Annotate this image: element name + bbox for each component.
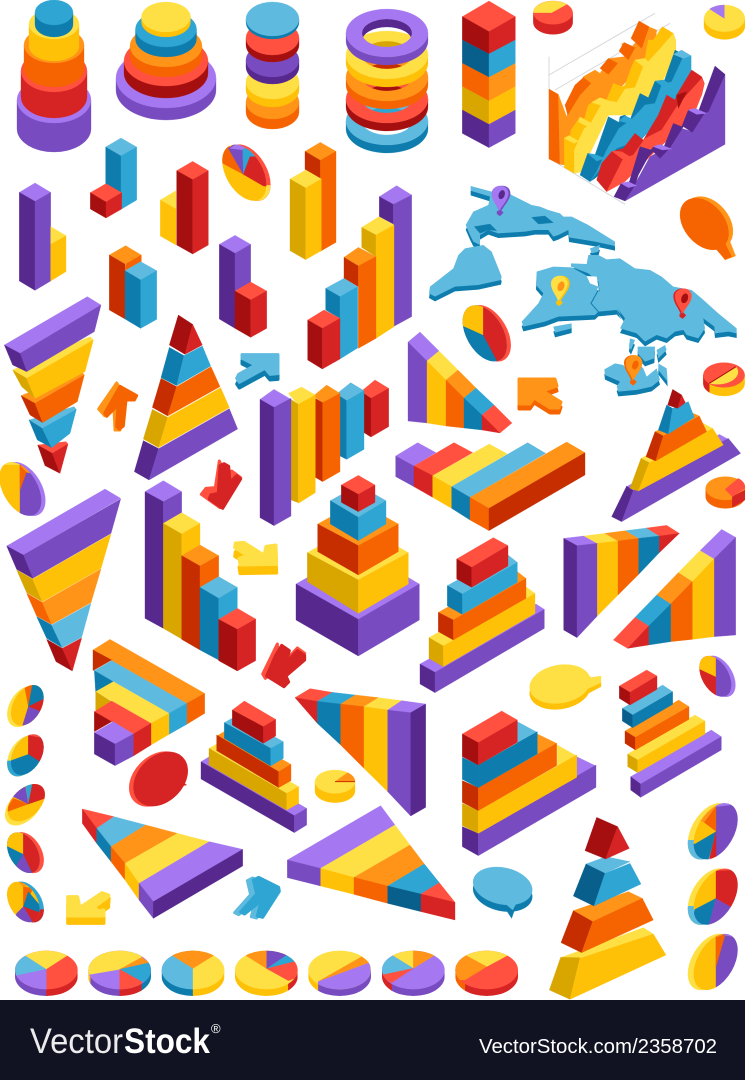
- orange arrow pointing up-left: [519, 379, 561, 413]
- right pie 3: [688, 934, 738, 990]
- descending bar chart: [145, 481, 256, 671]
- arrow: red down-left: [263, 644, 305, 687]
- tilted pie: blue red yellow: [462, 305, 511, 362]
- tilted pie chart: [222, 144, 271, 201]
- arrow: yellow down-right: [235, 542, 277, 574]
- pin: orange: [624, 355, 642, 385]
- logo: VectorStock: Stock: [124, 1022, 210, 1061]
- horizontal stepped bars: [396, 442, 585, 531]
- bar pair: orange and blue: [109, 246, 157, 328]
- arrow: blue up-right: [237, 355, 278, 388]
- stair bar stack: [462, 711, 596, 856]
- stacked rings: [346, 9, 428, 153]
- bar pair: blue and red: [90, 138, 137, 218]
- small pie: orange with red wedge: [706, 477, 745, 508]
- arrow: orange up: [99, 383, 137, 430]
- zone: middle-left charts: [0, 297, 389, 687]
- image id: VectorStock.com/2358702: [479, 1036, 717, 1058]
- tilted pie: yellow red purple: [699, 656, 736, 697]
- bar pair: yellow and red: [160, 161, 208, 254]
- bottom pie 2: [88, 950, 151, 996]
- lying pyramid bands: [287, 806, 455, 920]
- left pie 5: [6, 881, 44, 922]
- funnel: five stacked segments: [4, 297, 101, 473]
- bar pair: purple and red: [219, 235, 267, 337]
- small pie: red and yellow split: [703, 363, 745, 396]
- layered area chart: [549, 21, 725, 201]
- left pie 2: [7, 734, 44, 776]
- bottom pie 3: [162, 950, 224, 996]
- separated bar ladder: [619, 670, 721, 797]
- zone: central arrows: [99, 355, 278, 574]
- lying triangular pyramid: [82, 809, 243, 918]
- bottom pie 6: [382, 950, 445, 996]
- zone: lower-left elements: [0, 639, 522, 998]
- sideways triangular stack: [93, 639, 205, 766]
- stepped block pyramid: [420, 538, 544, 693]
- arrow: red down: [201, 461, 241, 508]
- stacked truncated pyramid: [549, 817, 666, 999]
- bottom pie 4: [235, 950, 298, 996]
- equal disc stack: [246, 2, 299, 129]
- zone: upper-left bar charts: [19, 137, 412, 369]
- inverted pyramid: large: [7, 489, 121, 671]
- bottom pie 7: [455, 950, 518, 996]
- arrow: yellow down-left: [68, 893, 111, 923]
- small pie: red and yellow: [533, 1, 573, 34]
- pin: purple: [492, 186, 510, 216]
- speech bubble: yellow: [526, 660, 601, 714]
- footer bar: [0, 1000, 745, 1080]
- arrow: blue up-right: [235, 877, 279, 918]
- rising bar chart: [308, 186, 412, 369]
- pin: red: [673, 288, 692, 319]
- pyramid: five stacked bands: [134, 315, 238, 480]
- zone: lower-right elements: [287, 670, 745, 999]
- speech bubble: orange: [670, 187, 743, 260]
- left pie 4: [7, 832, 44, 874]
- logo: VectorStock: ®: [211, 1021, 221, 1036]
- pin: yellow: [551, 276, 570, 306]
- logo: VectorStock: Vector: [30, 1022, 123, 1061]
- bar row: five descending columns: [260, 380, 389, 526]
- stacked cylinders tapering upward: [17, 0, 91, 152]
- triangular bars: rising right: [613, 529, 736, 648]
- gridlines of area chart: [549, 13, 670, 204]
- thin triangular pyramid: [612, 389, 741, 522]
- stacked discs pyramid: [116, 2, 216, 120]
- triangular bars: descending right: [564, 525, 679, 638]
- right pie 2: [688, 868, 738, 925]
- zone: centre and right pyramids: [296, 389, 745, 714]
- small pie: yellow and purple: [704, 5, 745, 39]
- bottom pie 5: [308, 950, 371, 996]
- bottom pie 1: [15, 950, 78, 996]
- bar pair: purple and yellow: [19, 183, 66, 290]
- world map with location pins: [429, 186, 737, 396]
- triangular bars: pointing right, purple tall side: [408, 332, 512, 433]
- small pie: yellow with orange wedge: [315, 770, 355, 803]
- left pie 3: [4, 784, 45, 826]
- left pie 1: [7, 685, 44, 728]
- logo: VectorStock: [30, 1021, 221, 1061]
- zone: upper-right charts: [450, 1, 745, 396]
- right pie 1: [688, 803, 738, 860]
- speech bubble: red: [118, 741, 199, 817]
- step stack pyramid: [201, 701, 307, 833]
- triangular bars: pointing left: [295, 689, 426, 816]
- block tower: [462, 1, 515, 148]
- tilted pie: yellow and purple: [0, 462, 46, 516]
- pyramid of stacked square blocks: [296, 475, 419, 656]
- speech bubble: blue: [470, 862, 536, 918]
- bar pair: yellow and orange: [290, 142, 336, 260]
